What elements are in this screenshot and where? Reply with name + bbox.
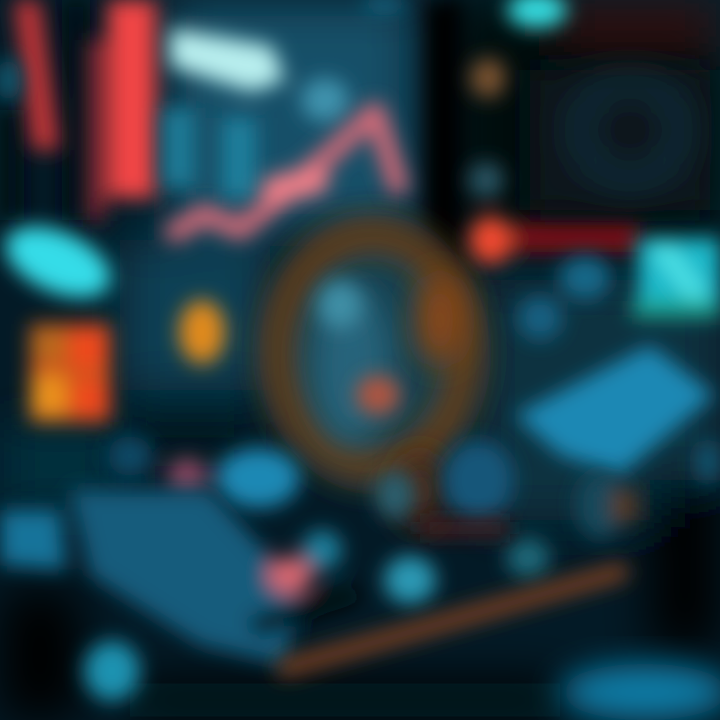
blue wedge paper <box>515 345 720 484</box>
coin: large ring with blue centre <box>270 225 480 528</box>
right column indicators <box>363 0 640 264</box>
wooden desk edge <box>285 520 620 668</box>
bottom cyan blob <box>84 641 140 701</box>
small amber block <box>179 300 225 364</box>
pale cyan highlight <box>0 28 349 198</box>
dark vertical post <box>0 0 463 290</box>
keyboard <box>0 490 360 665</box>
pink rising chart line <box>175 112 398 232</box>
cyan cluster right <box>518 238 720 340</box>
scattered desk objects <box>108 436 636 604</box>
cyan glowing blob left <box>0 212 121 312</box>
bottom right blue glow <box>560 664 720 720</box>
dark monitor on the right <box>530 70 710 210</box>
orange indicator block <box>30 324 110 422</box>
red candlestick bars <box>14 0 156 220</box>
